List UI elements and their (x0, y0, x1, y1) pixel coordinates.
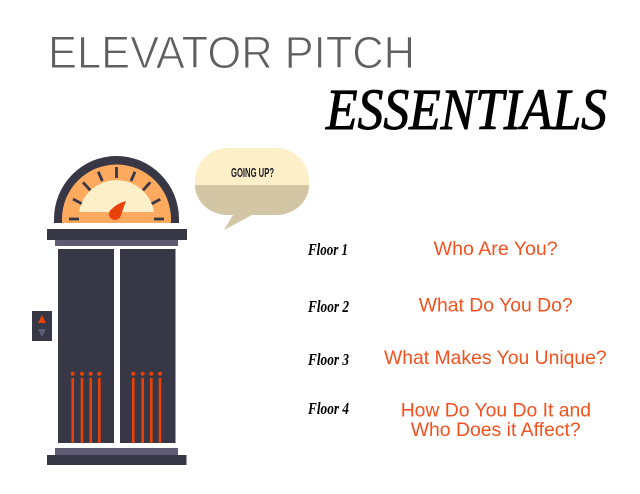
speech bubble (195, 148, 309, 230)
floor 1 row: Who Are You? (434, 238, 558, 260)
gauge needle (109, 201, 126, 220)
floor 4 row: Who Does it Affect? (411, 419, 581, 441)
floor 3 row: Floor 3 (307, 350, 349, 369)
bubble text: GOING UP? (231, 165, 274, 180)
gauge dome (54, 156, 179, 223)
top header bar (47, 229, 187, 246)
floor 1 row: Floor 1 (307, 240, 348, 259)
floor 4 row: Floor 4 (307, 399, 349, 418)
floor 2 row: What Do You Do? (419, 295, 573, 317)
call buttons (32, 311, 52, 341)
elevator illustration (32, 156, 187, 465)
floor 2 row: Floor 2 (307, 297, 349, 316)
right door (120, 249, 176, 443)
floor 1 row (307, 238, 558, 260)
bottom base bar (47, 448, 186, 465)
floor 4 row (307, 399, 591, 441)
floor 2 row (307, 295, 573, 317)
floor 4 row: How Do You Do It and (401, 400, 591, 422)
left door (58, 249, 114, 443)
title: elevator pitch: ELEVATOR PITCH (48, 27, 415, 78)
title: essentials: ESSENTIALS (325, 77, 607, 142)
floor 3 row: What Makes You Unique? (384, 347, 607, 369)
